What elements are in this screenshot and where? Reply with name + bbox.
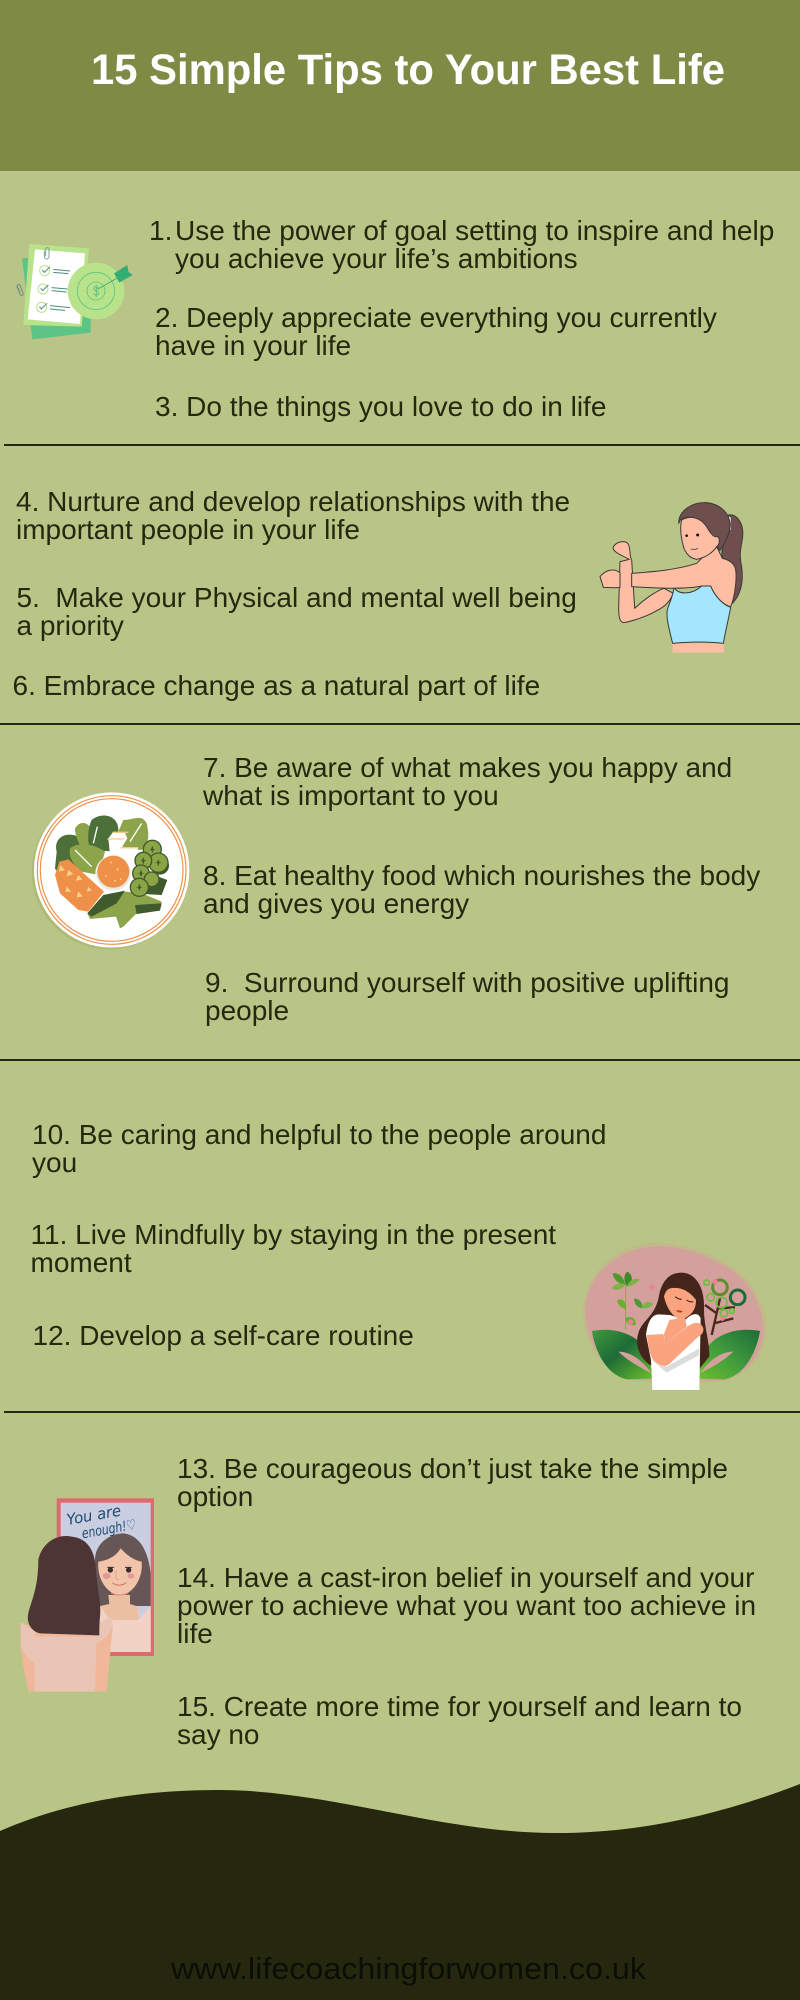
tip 7: what is important to you xyxy=(202,780,499,811)
title: 15 Simple Tips to Your Best Life xyxy=(91,46,725,94)
icon: woman hugging herself xyxy=(583,1243,767,1390)
tip 11 xyxy=(30,1219,556,1278)
tip 11: moment xyxy=(30,1247,132,1278)
panel: tips 10 to 12 xyxy=(30,1119,767,1390)
tip 14 xyxy=(177,1562,756,1649)
tip 10: you xyxy=(32,1147,77,1178)
tip 4 xyxy=(16,486,570,545)
tip 4: important people in your life xyxy=(16,514,360,545)
tip 1: Use the power of goal setting to inspire and help xyxy=(175,215,774,246)
tip 13 xyxy=(177,1453,728,1512)
tip 1: you achieve your life’s ambitions xyxy=(175,243,578,274)
tip 9: 9. Surround yourself with positive uplifting xyxy=(205,967,730,998)
tip 7 xyxy=(202,752,732,811)
tip 14: life xyxy=(177,1618,213,1649)
tip 15 xyxy=(177,1691,742,1750)
footer website address: www.lifecoachingforwomen.co.uk xyxy=(170,1951,647,1986)
tip 12: 12. Develop a self-care routine xyxy=(32,1320,414,1351)
mirror text line 2: enough!♡ xyxy=(81,1517,138,1542)
tip 9: people xyxy=(205,995,289,1026)
icon: woman stretching xyxy=(600,503,743,653)
tip 5: a priority xyxy=(16,610,124,641)
panel: tips 4 to 6 xyxy=(12,486,743,701)
tip 1 xyxy=(149,215,774,274)
tip 15: say no xyxy=(177,1719,260,1750)
footer wave xyxy=(0,1784,800,2000)
mirror text: You are xyxy=(65,1502,123,1529)
tip 8: and gives you energy xyxy=(203,888,469,919)
header band xyxy=(0,0,800,171)
icon: woman looking in mirror xyxy=(21,1498,154,1692)
tip 2: 2. Deeply appreciate everything you currently xyxy=(155,302,717,333)
tip 5: 5. Make your Physical and mental well being xyxy=(16,582,577,613)
icon: plate of healthy food xyxy=(32,792,189,950)
tip 2: have in your life xyxy=(155,330,351,361)
tip 13: 13. Be courageous don’t just take the simple xyxy=(177,1453,728,1484)
tip 14: 14. Have a cast-iron belief in yourself and your xyxy=(177,1562,754,1593)
tip 10 xyxy=(32,1119,606,1178)
tip 2 xyxy=(155,302,717,361)
tip 7: 7. Be aware of what makes you happy and xyxy=(203,752,732,783)
tip 8: 8. Eat healthy food which nourishes the body xyxy=(203,860,760,891)
panel: tips 1 to 3 xyxy=(17,215,774,422)
tip 9 xyxy=(205,967,730,1026)
icon: checklist and target xyxy=(17,244,133,339)
tip 15: 15. Create more time for yourself and learn to xyxy=(177,1691,742,1722)
tip 8 xyxy=(203,860,760,919)
tip 13: option xyxy=(177,1481,253,1512)
tip 11: 11. Live Mindfully by staying in the present xyxy=(30,1219,556,1250)
tip 1: 1. xyxy=(149,215,172,246)
tip 6: 6. Embrace change as a natural part of life xyxy=(12,670,540,701)
tip 14: power to achieve what you want too achieve in xyxy=(177,1590,756,1621)
panel: tips 13 to 15 xyxy=(21,1453,756,1750)
tip 10: 10. Be caring and helpful to the people around xyxy=(32,1119,606,1150)
tip 3: 3. Do the things you love to do in life xyxy=(155,391,606,422)
panel: tips 7 to 9 xyxy=(32,752,760,1026)
tip 4: 4. Nurture and develop relationships with the xyxy=(16,486,570,517)
tip 5 xyxy=(16,582,577,641)
